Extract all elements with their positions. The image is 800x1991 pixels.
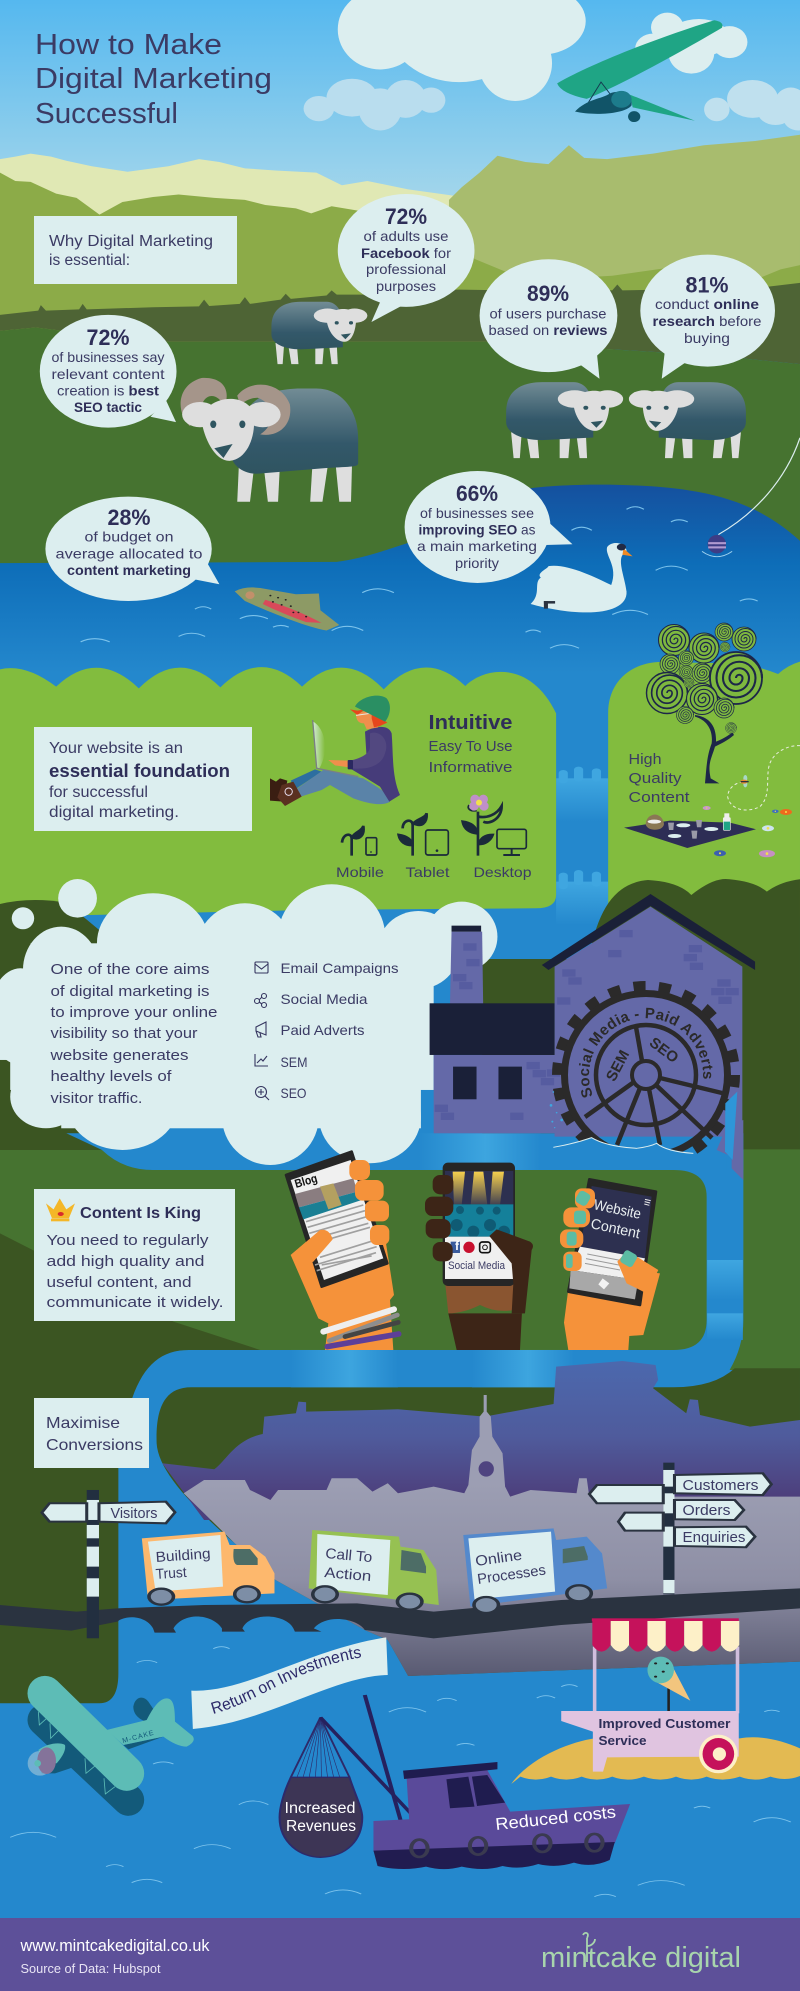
orange truck: building trust: Building	[155, 1546, 211, 1566]
right bank	[730, 1149, 800, 1370]
mill wall corner and stream	[550, 1091, 743, 1180]
cloud paragraph: visitor traffic.	[50, 1090, 142, 1107]
channel list: Social Media	[280, 991, 368, 1007]
green truck: call to action: Call To	[325, 1546, 373, 1566]
why digital marketing box: Why Digital Marketing	[49, 233, 213, 250]
bubble: budget stat: content marketing	[67, 562, 191, 578]
bubble: content creation stat: relevant content	[52, 366, 165, 382]
green truck: call to action: Action	[324, 1565, 372, 1585]
meadow panel with river bend	[0, 1150, 707, 1370]
green meadow	[0, 327, 800, 631]
bubble: reviews stat: 89%	[527, 281, 569, 306]
hang glider	[557, 20, 722, 122]
footer website url: www.mintcakedigital.co.uk	[20, 1937, 210, 1955]
channel list	[280, 960, 398, 1101]
bee and dashed flight path	[728, 746, 800, 810]
flowers	[703, 806, 792, 857]
hand holding website content phone: Content	[589, 1216, 641, 1242]
hand holding website content phone: Website	[592, 1197, 642, 1223]
intuitive text: Informative	[428, 759, 512, 776]
maximise conversions box: Maximise	[46, 1415, 120, 1432]
cloud paragraph: of digital marketing is	[50, 983, 210, 1000]
cloud paragraph: One of the core aims	[50, 961, 210, 978]
device labels	[336, 864, 532, 880]
customers orders enquiries signpost	[589, 1463, 771, 1594]
customers orders enquiries signpost: Customers	[682, 1477, 758, 1494]
bubble: budget stat: 28%	[108, 505, 150, 530]
intuitive text: Easy To Use	[428, 738, 512, 755]
bubble: budget stat: average allocated to	[56, 546, 203, 562]
forest band	[0, 283, 800, 364]
channel list icons	[254, 962, 269, 1100]
bubble: SEO priority stat: of businesses see	[420, 505, 534, 521]
title: Successful	[35, 98, 178, 130]
title: How to Make	[35, 29, 222, 61]
fishing float and line	[702, 438, 800, 557]
bubble: SEO priority stat: 66%	[456, 481, 498, 506]
wave line under wheel	[553, 1138, 693, 1153]
hand holding website content phone	[560, 1179, 660, 1350]
title: Digital Marketing	[35, 63, 272, 95]
lake and water body	[0, 485, 800, 1991]
ram	[181, 378, 358, 502]
banner: return on investments: Return on Investments	[211, 1648, 361, 1714]
fishing net with increased revenues	[280, 1717, 362, 1857]
water wheel: SEM	[603, 1048, 633, 1084]
small sheep	[271, 302, 367, 364]
why digital marketing box: is essential:	[49, 252, 130, 269]
intuitive text: Intuitive	[428, 712, 512, 734]
content is king box: You need to regularly	[46, 1232, 209, 1249]
water wheel: SEO	[646, 1034, 682, 1067]
bubble: SEO priority stat: improving SEO as	[418, 522, 536, 538]
bubble: facebook stat	[338, 194, 474, 322]
channel list: Email Campaigns	[280, 960, 398, 976]
cloud paragraph: website generates	[49, 1047, 188, 1064]
swan	[531, 543, 633, 612]
bubble: online research stat: research before	[652, 313, 762, 329]
bubble: online research stat: 81%	[686, 272, 728, 298]
visitors signpost: Visitors	[110, 1505, 158, 1522]
mid green hills	[0, 173, 800, 349]
bubble: reviews stat: of users purchase	[490, 306, 607, 322]
lower left dark bank	[0, 1233, 260, 1703]
green truck: call to action	[309, 1530, 439, 1610]
waterfall highlight	[556, 767, 608, 925]
bubble: SEO priority stat: priority	[455, 555, 499, 571]
bubble: SEO priority stat: a main marketing	[417, 538, 537, 554]
device labels: Mobile	[336, 864, 384, 880]
channel list: SEM	[280, 1054, 308, 1070]
hand holding social media phone: Social Media	[448, 1260, 506, 1272]
fishing net with increased revenues: Increased	[284, 1800, 356, 1817]
bubble: budget stat	[45, 497, 219, 601]
bubble: budget stat: of budget on	[84, 528, 174, 544]
bubble: facebook stat: Facebook for	[361, 245, 451, 261]
device labels: Desktop	[474, 864, 532, 880]
sheep facing right	[506, 382, 623, 458]
blue truck: online processes: Processes	[476, 1563, 547, 1588]
fishing boat with reduced costs: Reduced costs	[494, 1802, 617, 1834]
channel list: SEO	[280, 1085, 307, 1101]
ice cream cart: Improved Customer	[598, 1716, 730, 1731]
left dark hill	[0, 900, 163, 1150]
channel list: Paid Adverts	[280, 1022, 364, 1038]
website foundation box: essential foundation	[49, 761, 230, 781]
bubble: online research stat	[640, 255, 775, 379]
right dark hill	[482, 879, 800, 1150]
castle rock silhouette	[162, 1361, 800, 1520]
cloud behind glider	[635, 13, 747, 74]
bubble: SEO priority stat	[405, 471, 572, 583]
bubble: reviews stat: based on reviews	[488, 322, 608, 338]
mintcake digital logo: mintcake digital	[541, 1942, 741, 1974]
why digital marketing box	[34, 216, 237, 284]
town and clock tower silhouette	[184, 1395, 800, 1676]
river light bands	[291, 1150, 743, 1387]
icon: crown	[46, 1198, 75, 1221]
bubble: online research stat: conduct online	[655, 296, 759, 312]
bubble: facebook stat: of adults use	[364, 228, 449, 244]
blue truck: online processes	[463, 1528, 607, 1613]
water under mill	[66, 1133, 743, 1170]
large cloud	[338, 0, 586, 101]
customers orders enquiries signpost: Orders	[682, 1502, 730, 1519]
bubble: facebook stat: 72%	[385, 204, 427, 229]
ice cream cart: Service	[598, 1733, 646, 1748]
bubble: content creation stat: of businesses say	[52, 349, 164, 365]
maximise conversions box: Conversions	[46, 1437, 143, 1454]
website foundation box: Your website is an	[49, 740, 183, 757]
thought cloud	[0, 879, 497, 1165]
fishing net with increased revenues: Revenues	[286, 1818, 356, 1835]
spiral tree	[646, 623, 762, 783]
hand holding social media phone	[425, 1163, 533, 1350]
website foundation box: for successful	[49, 784, 148, 801]
trout	[235, 587, 339, 631]
watermill buildings	[430, 894, 755, 1137]
sand island	[511, 1737, 800, 1784]
intuitive text	[428, 712, 512, 776]
customers orders enquiries signpost: Enquiries	[682, 1529, 746, 1546]
water wheel	[552, 981, 740, 1154]
cloud paragraph	[49, 961, 218, 1107]
picnic blanket scene	[624, 813, 756, 848]
bubble: facebook stat: professional	[366, 261, 446, 277]
bubble: online research stat: buying	[684, 330, 730, 346]
bubble: content creation stat: SEO tactic	[74, 399, 142, 415]
visitors signpost	[42, 1490, 175, 1638]
title	[35, 29, 272, 130]
water in front of wheel	[540, 1138, 727, 1170]
content is king box: Content Is King	[80, 1205, 201, 1222]
water ripples upper	[81, 507, 758, 648]
cloud paragraph: visibility so that your	[50, 1025, 198, 1042]
bubble: content creation stat: creation is best	[57, 382, 159, 398]
biplane	[28, 1693, 194, 1800]
dark inner land	[157, 1368, 800, 1676]
content is king box	[34, 1189, 235, 1321]
water base lower	[0, 1150, 800, 1918]
sheep facing left	[629, 382, 746, 458]
sky background	[0, 0, 800, 240]
content is king box: communicate it widely.	[46, 1294, 224, 1311]
road and bridge	[0, 1588, 800, 1638]
high quality content text: Quality	[628, 770, 682, 787]
high quality content text	[628, 751, 690, 806]
ice cream cart	[561, 1618, 739, 1773]
water wheel: Social Media - Paid Adverts	[579, 1008, 712, 1098]
website foundation box	[34, 727, 252, 831]
footer bar	[0, 1918, 800, 1991]
footer source: Source of Data: Hubspot	[20, 1962, 161, 1976]
hand holding blog phone: Blog	[293, 1171, 319, 1191]
mill race light band	[418, 1133, 541, 1170]
bubble: facebook stat: purposes	[376, 278, 436, 294]
left small cloud	[304, 79, 445, 130]
panel: picnic green hill	[608, 662, 800, 917]
bubble: reviews stat	[480, 259, 617, 379]
panel: website green hill	[0, 667, 556, 915]
orange truck: building trust: Trust	[155, 1565, 187, 1583]
right small cloud	[704, 80, 800, 130]
content is king box: add high quality and	[46, 1253, 204, 1270]
bubble: content creation stat	[40, 315, 177, 428]
water ripples lower	[10, 1647, 791, 1897]
hand holding blog phone	[286, 1152, 399, 1350]
content is king box: useful content, and	[46, 1274, 192, 1291]
orange truck: building trust	[142, 1532, 274, 1605]
high quality content text: Content	[628, 789, 690, 806]
high quality content text: High	[628, 751, 662, 768]
plane registration: M-CAKE	[122, 1730, 155, 1745]
right mountain	[449, 135, 800, 303]
hand holding social media phone: f	[455, 1239, 460, 1253]
fishing boat with reduced costs	[320, 1695, 630, 1869]
pale distant mountain	[0, 154, 454, 295]
maximise conversions box	[34, 1398, 149, 1468]
banner: return on investments	[191, 1637, 388, 1729]
laptop person	[270, 696, 400, 806]
bubble: content creation stat: 72%	[86, 325, 130, 350]
blue truck: online processes: Online	[474, 1548, 523, 1570]
cloud paragraph: to improve your online	[50, 1004, 218, 1021]
website foundation box: digital marketing.	[49, 804, 179, 821]
cloud paragraph: healthy levels of	[50, 1068, 172, 1085]
device labels: Tablet	[406, 864, 450, 880]
plant device icons	[342, 795, 526, 856]
